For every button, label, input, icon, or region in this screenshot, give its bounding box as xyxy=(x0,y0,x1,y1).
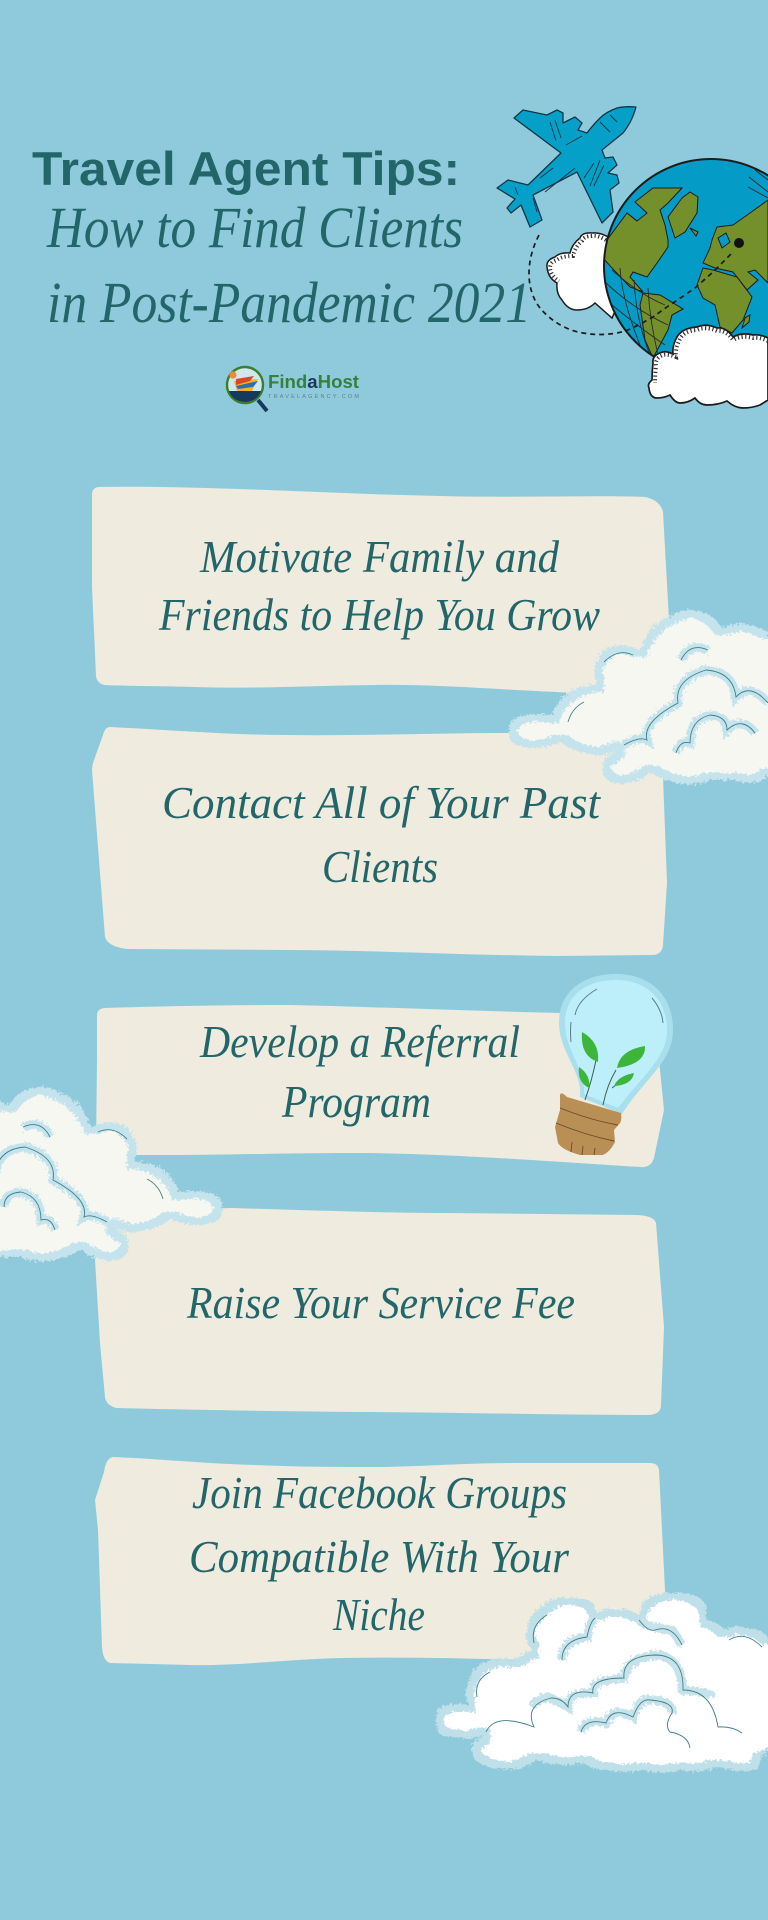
icon: globe xyxy=(603,159,768,373)
title: Travel Agent Tips: xyxy=(32,142,460,195)
panel: tip 5: Compatible With Your xyxy=(189,1531,570,1582)
icon: bottom cloud on globe xyxy=(648,325,768,408)
panel: tip 2 xyxy=(92,727,667,956)
panel: tip 2: Clients xyxy=(322,841,438,892)
panel: tip 1: Motivate Family and xyxy=(199,531,560,582)
panel: tip 4: Raise Your Service Fee xyxy=(186,1277,575,1328)
logo: FindaHost Travel Agency: FindaHost xyxy=(268,372,359,392)
panel: tip 3: Program xyxy=(281,1076,431,1127)
icon: airplane xyxy=(497,107,636,227)
title xyxy=(32,142,531,335)
title: in Post-Pandemic 2021 xyxy=(47,270,531,335)
panel: tip 5: Join Facebook Groups xyxy=(192,1467,567,1518)
logo: FindaHost Travel Agency xyxy=(227,367,359,411)
panel: tip 1 xyxy=(92,487,669,693)
icon: cloud lower right xyxy=(436,1592,768,1772)
icon: cloud upper right xyxy=(509,610,768,785)
icon: dashed flight path xyxy=(529,235,732,334)
panel: tip 2: Contact All of Your Past xyxy=(162,777,601,828)
icon: left cloud behind globe xyxy=(547,233,620,318)
panel: tip 5 xyxy=(95,1457,665,1665)
panel: tip 5: Niche xyxy=(332,1589,425,1640)
panel: tip 3: Develop a Referral xyxy=(199,1016,520,1067)
panel: tip 4 xyxy=(95,1208,664,1415)
panel: tip 3 xyxy=(96,1005,664,1167)
icon: light bulb with plant xyxy=(555,974,673,1155)
title: How to Find Clients xyxy=(46,195,463,260)
panel: tip 1: Friends to Help You Grow xyxy=(158,589,600,640)
logo: FindaHost Travel Agency: TRAVELAGENCY.COM xyxy=(268,394,359,400)
icon: cloud left xyxy=(0,1087,222,1262)
